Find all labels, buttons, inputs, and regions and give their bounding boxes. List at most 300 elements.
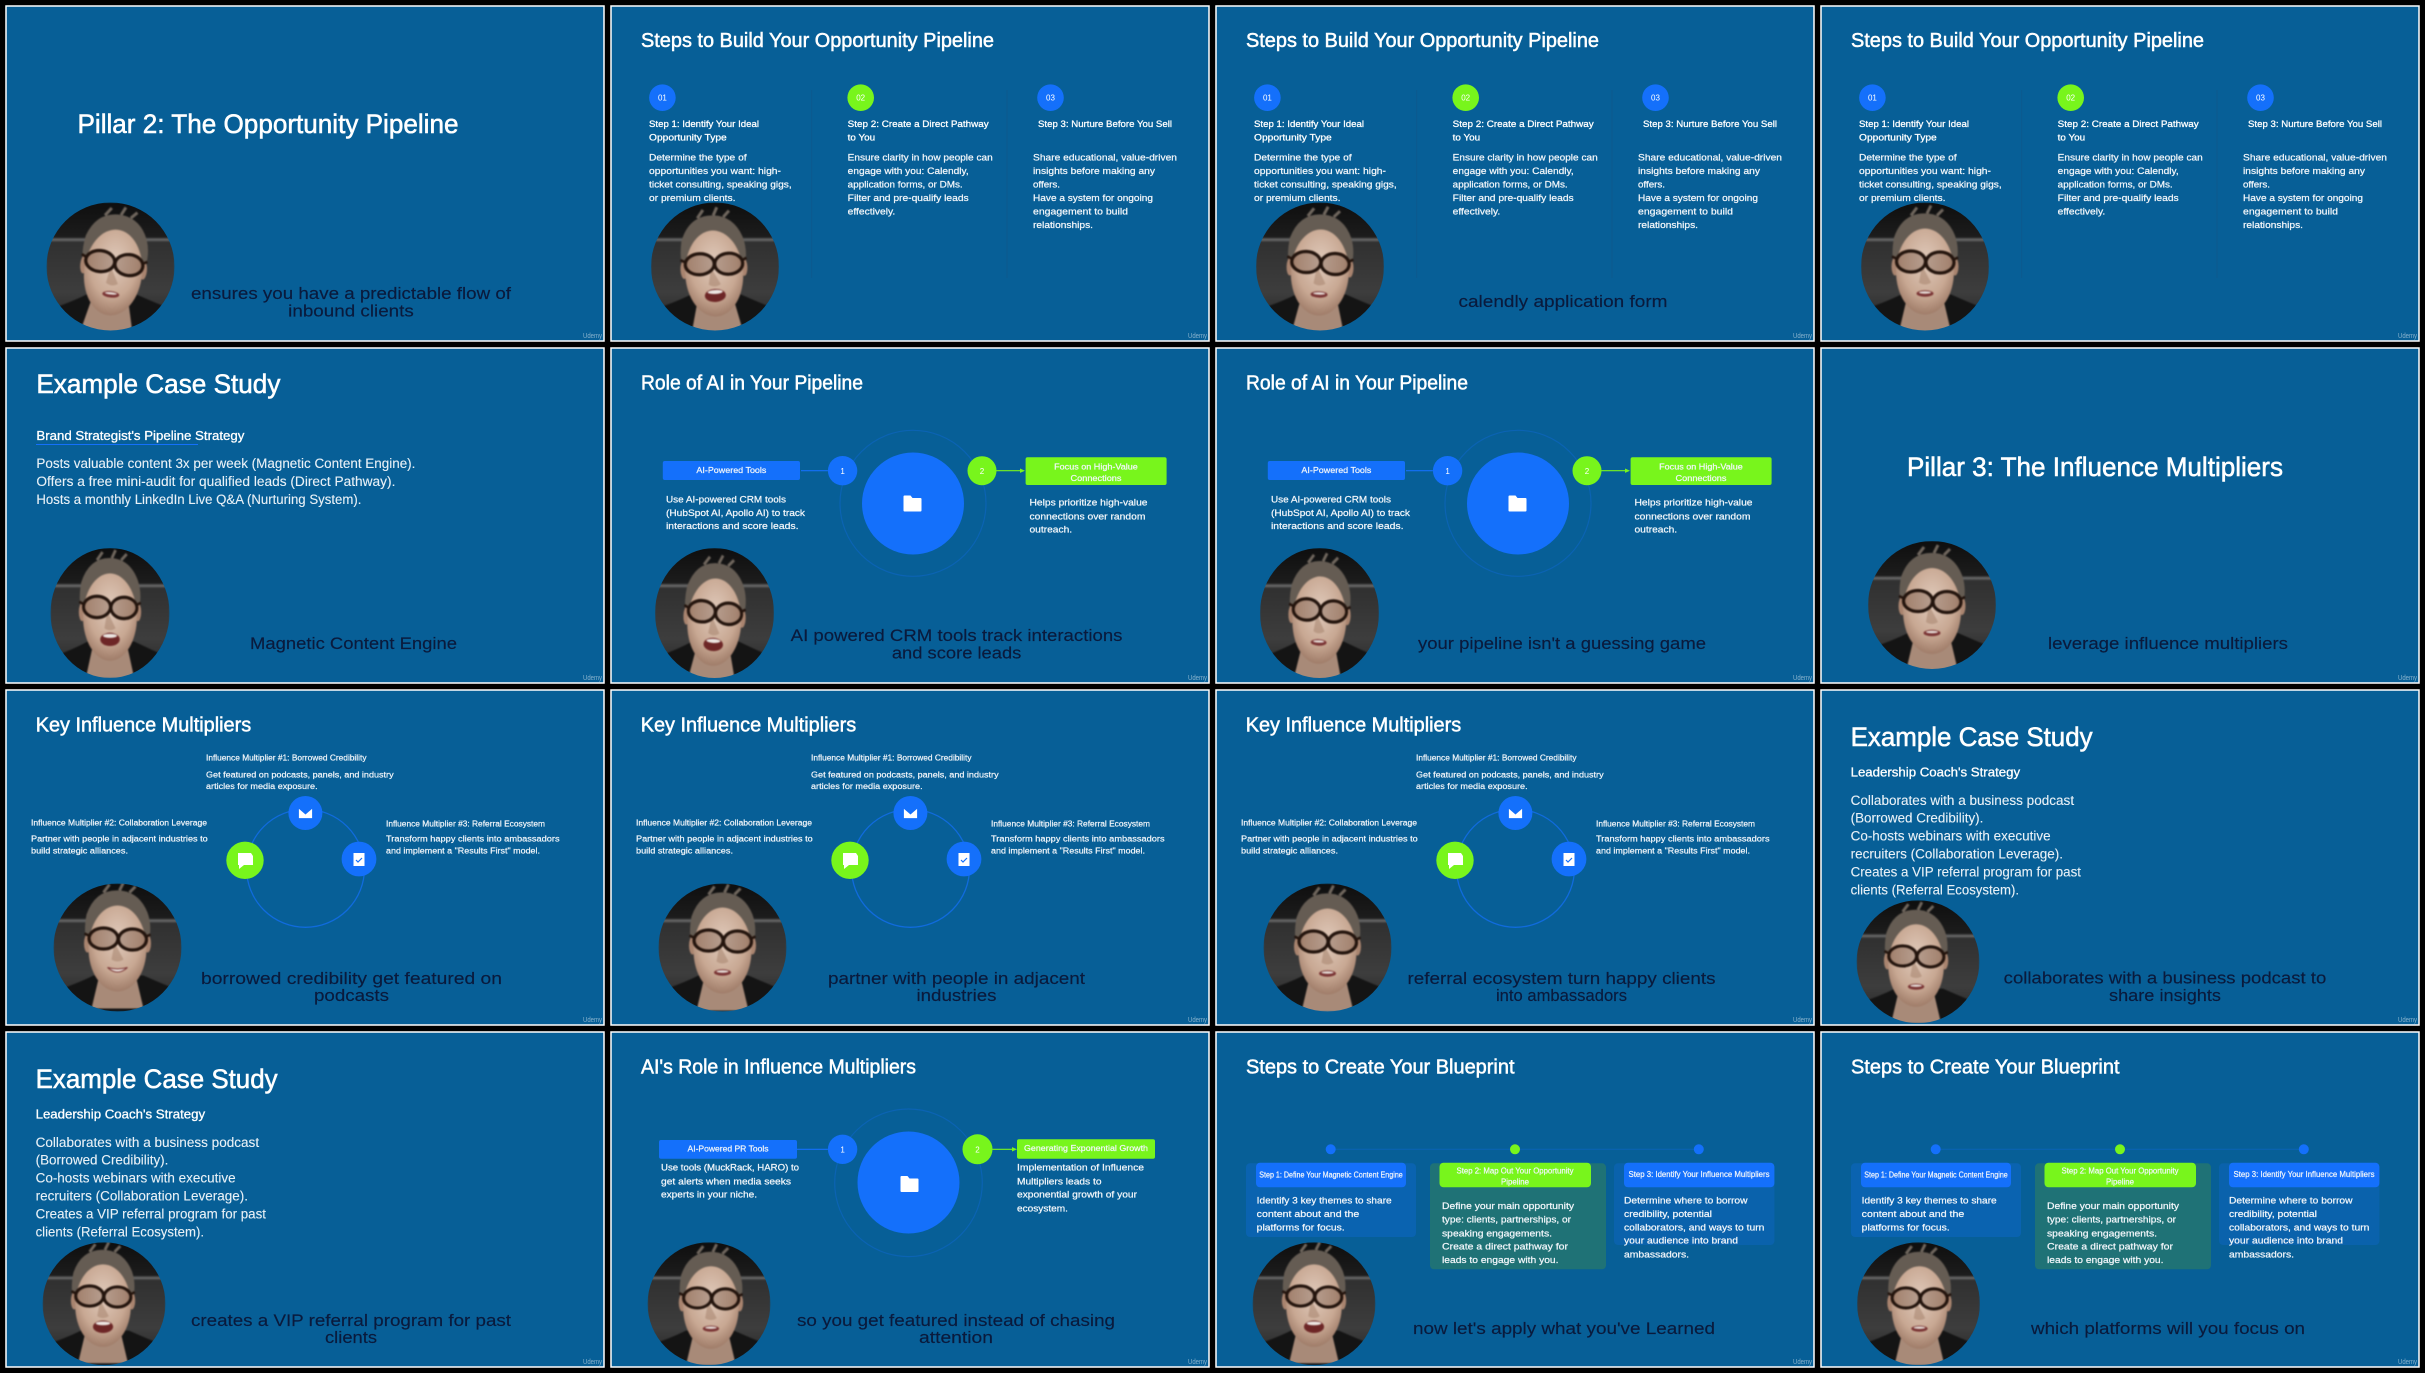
body text: (Borrowed Credibility). (1851, 811, 1983, 826)
step 3 card: ambassadors. (1624, 1249, 1689, 1260)
step 3 column: Have a system for ongoing (1638, 193, 1758, 204)
step 1 card: Identify 3 key themes to share (1257, 1195, 1392, 1206)
multiplier 3 text: Transform happy clients into ambassadors (991, 835, 1165, 844)
right description: ecosystem. (1017, 1203, 1068, 1214)
multiplier 3 text (386, 819, 560, 855)
timeline (1931, 1144, 2309, 1154)
step 2 column: to You (1453, 133, 1480, 144)
caption (791, 626, 1122, 662)
watermark: Udemy (1188, 333, 1207, 340)
caption: which platforms will you focus on (2030, 1319, 2305, 1338)
caption: share insights (2109, 986, 2221, 1005)
right node and label: Connections (1676, 474, 1726, 483)
step 2 card: Pipeline (2106, 1177, 2135, 1186)
caption: creates a VIP referral program for past (191, 1311, 511, 1330)
multiplier 1 text: Get featured on podcasts, panels, and industry (1416, 770, 1604, 779)
multiplier 2 text (636, 818, 813, 855)
right description: exponential growth of your (1017, 1190, 1138, 1201)
right description: Helps prioritize high-value (1030, 498, 1148, 509)
step 2 card: speaking engagements. (2047, 1228, 2157, 1239)
cycle diagram (831, 796, 981, 927)
step 1 column: ticket consulting, speaking gigs, (1859, 180, 2002, 191)
step 2 column: application forms, or DMs. (2058, 180, 2173, 191)
caption: so you get featured instead of chasing (797, 1311, 1115, 1330)
step 3 card: credibility, potential (1624, 1209, 1712, 1220)
panel: leadership coach case study, frame 1 (1821, 690, 2419, 1025)
multiplier 2 text: build strategic alliances. (1241, 846, 1338, 855)
step 3 card: Step 3: Identify Your Influence Multipliers (1628, 1170, 1770, 1179)
panel: steps to create blueprint, frame 2 (1821, 1032, 2419, 1367)
panel: role of AI, frame 1 (611, 348, 1209, 685)
step 3 column: insights before making any (1638, 166, 1760, 177)
step 2 column: Ensure clarity in how people can (2058, 153, 2203, 164)
step 3 card (2219, 1163, 2379, 1260)
step 2 card (2035, 1163, 2211, 1269)
body text: (Borrowed Credibility). (36, 1153, 168, 1168)
step 2 card: Define your main opportunity (2047, 1201, 2179, 1212)
step 2 column (1452, 84, 1598, 218)
slide title: Steps to Build Your Opportunity Pipeline (1851, 30, 2204, 52)
step 2 card: Pipeline (1501, 1177, 1530, 1186)
step 2 card: Step 2: Map Out Your Opportunity (2062, 1167, 2178, 1176)
left node and label: AI-Powered Tools (1301, 466, 1371, 475)
step 3 column (1033, 84, 1177, 231)
caption: leverage influence multipliers (2048, 634, 2288, 653)
multiplier 1 text: Influence Multiplier #1: Borrowed Credibility (811, 754, 972, 763)
step 2 card: Create a direct pathway for (1442, 1242, 1569, 1253)
step 1 card: Step 1: Define Your Magnetic Content Engine (1259, 1170, 1403, 1179)
panel: steps to build pipeline, frame 1 (611, 6, 1209, 341)
step 1 column: or premium clients. (1254, 193, 1340, 204)
right node and label (962, 1134, 1155, 1164)
right node and label: Generating Exponential Growth (1024, 1144, 1148, 1153)
body text (36, 1135, 266, 1240)
step 2 column: Step 2: Create a Direct Pathway (848, 119, 989, 130)
step 3 column: 03 (1046, 94, 1055, 102)
step 1 column (1254, 84, 1397, 204)
caption: ensures you have a predictable flow of (191, 284, 511, 303)
step 1 card: Step 1: Define Your Magnetic Content Engine (1864, 1170, 2008, 1179)
step 1 column: Step 1: Identify Your Ideal (1859, 119, 1969, 130)
left node and label: 1 (840, 467, 845, 476)
step 2 column: engage with you: Calendly, (2058, 166, 2179, 177)
caption (797, 1311, 1115, 1347)
step 3 column: 03 (2256, 94, 2265, 102)
step 2 column: Ensure clarity in how people can (848, 153, 993, 164)
left description: (HubSpot AI, Apollo AI) to track (1271, 508, 1410, 519)
step 1 card (1246, 1163, 1416, 1237)
left description (661, 1163, 799, 1201)
step 3 card: credibility, potential (2229, 1209, 2317, 1220)
multiplier 2 text (1241, 818, 1418, 855)
step 3 column: Step 3: Nurture Before You Sell (2248, 119, 2382, 130)
multiplier 1 text: Get featured on podcasts, panels, and industry (206, 770, 394, 779)
watermark: Udemy (1793, 1017, 1812, 1024)
step 3 card: collaborators, and ways to turn (2229, 1222, 2369, 1233)
step 1 column: opportunities you want: high- (649, 166, 781, 177)
central hub diagram (1445, 430, 1591, 576)
presenter portrait (1260, 548, 1379, 682)
slide title: Steps to Create Your Blueprint (1851, 1056, 2120, 1078)
right description: outreach. (1030, 525, 1072, 536)
panel: leadership coach case study, frame 2 (6, 1032, 604, 1367)
body text: clients (Referral Ecosystem). (36, 1225, 204, 1240)
cycle diagram (1436, 796, 1586, 927)
step 1 column: ticket consulting, speaking gigs, (1254, 180, 1397, 191)
multiplier 2 text: build strategic alliances. (31, 846, 128, 855)
step 1 column: 01 (1263, 94, 1272, 102)
right description (1634, 498, 1752, 536)
slide title: Example Case Study (36, 1064, 278, 1094)
panel: steps to build pipeline, frame 3 (1821, 6, 2419, 341)
caption (1408, 969, 1716, 1005)
step 1 column: ticket consulting, speaking gigs, (649, 180, 792, 191)
step 1 card: content about and the (1862, 1209, 1964, 1220)
multiplier 2 text: Influence Multiplier #2: Collaboration Leverage (31, 818, 208, 827)
watermark: Udemy (583, 1017, 602, 1024)
multiplier 3 text: and implement a "Results First" model. (386, 846, 540, 855)
step 3 column: engagement to build (2243, 206, 2338, 218)
left node and label: 1 (1445, 467, 1450, 476)
left description: Use tools (MuckRack, HARO) to (661, 1163, 799, 1174)
caption: calendly application form (1458, 292, 1668, 311)
presenter portrait (1857, 1242, 1980, 1365)
multiplier 3 text (991, 819, 1165, 855)
right description: outreach. (1634, 525, 1677, 536)
step 3 column: Have a system for ongoing (2243, 193, 2363, 204)
body text: Posts valuable content 3x per week (Magnetic Content Engine). (36, 456, 415, 471)
step 1 card: content about and the (1257, 1209, 1359, 1220)
watermark: Udemy (1188, 1017, 1207, 1024)
step 2 card: type: clients, partnerships, or (1442, 1215, 1572, 1226)
step 1 column: Determine the type of (649, 153, 747, 164)
slide title: Steps to Create Your Blueprint (1246, 1056, 1515, 1078)
body text: recruiters (Collaboration Leverage). (36, 1189, 248, 1204)
body text: clients (Referral Ecosystem). (1851, 883, 2019, 898)
step 1 column (1859, 84, 2002, 204)
body text (1851, 793, 2081, 898)
step 3 card (1614, 1163, 1774, 1260)
step 3 column: Step 3: Nurture Before You Sell (1643, 119, 1777, 130)
caption: partner with people in adjacent (828, 969, 1085, 988)
panel: AI's role in influence multipliers (611, 1032, 1209, 1367)
watermark: Udemy (1793, 333, 1812, 340)
presenter portrait (1253, 1242, 1375, 1365)
caption: AI powered CRM tools track interactions (791, 626, 1122, 645)
step 3 column: engagement to build (1638, 206, 1733, 218)
step 2 card: speaking engagements. (1442, 1228, 1552, 1239)
left node and label (663, 456, 857, 485)
timeline (1326, 1144, 1704, 1154)
step 1 card: platforms for focus. (1862, 1222, 1950, 1233)
right node and label (1572, 456, 1772, 485)
slide title: Key Influence Multipliers (36, 714, 251, 736)
step 2 column: application forms, or DMs. (1453, 180, 1568, 191)
step 2 card: Define your main opportunity (1442, 1201, 1574, 1212)
step 1 column: opportunities you want: high- (1859, 166, 1991, 177)
panel: Pillar 2 title slide (6, 6, 604, 341)
subheading: Brand Strategist's Pipeline Strategy (36, 428, 245, 443)
step 3 column: Share educational, value-driven (1638, 153, 1782, 164)
step 3 column: Step 3: Nurture Before You Sell (1038, 119, 1172, 130)
left description: interactions and score leads. (666, 521, 798, 532)
left node and label (1268, 456, 1462, 485)
multiplier 1 text: articles for media exposure. (1416, 782, 1528, 791)
left description: interactions and score leads. (1271, 521, 1404, 532)
left node and label: AI-Powered PR Tools (688, 1145, 768, 1154)
step 2 card: Step 2: Map Out Your Opportunity (1456, 1167, 1574, 1176)
right description: connections over random (1030, 511, 1146, 522)
step 2 card: type: clients, partnerships, or (2047, 1215, 2177, 1226)
body text: Creates a VIP referral program for past (1851, 865, 2081, 880)
caption: your pipeline isn't a guessing game (1418, 634, 1706, 653)
multiplier 1 text: Get featured on podcasts, panels, and industry (811, 770, 999, 779)
step 3 card: ambassadors. (2229, 1249, 2294, 1260)
panel: role of AI, frame 2 (1216, 348, 1814, 683)
step 2 column: to You (848, 133, 875, 144)
caption (191, 284, 511, 320)
step 3 column: Share educational, value-driven (2243, 153, 2387, 164)
left description: Use AI-powered CRM tools (666, 494, 786, 505)
multiplier 1 text: Influence Multiplier #1: Borrowed Credibility (206, 754, 366, 763)
step 2 column: Filter and pre-qualify leads (848, 193, 969, 204)
step 2 column: engage with you: Calendly, (848, 166, 969, 177)
step 1 column: Step 1: Identify Your Ideal (1254, 119, 1364, 130)
multiplier 3 text: Influence Multiplier #3: Referral Ecosystem (1596, 819, 1755, 828)
left description (1271, 494, 1410, 532)
multiplier 2 text: Influence Multiplier #2: Collaboration Leverage (636, 818, 813, 827)
step 1 column: Step 1: Identify Your Ideal (649, 119, 759, 130)
step 3 column: offers. (2243, 180, 2270, 191)
step 1 column: Opportunity Type (1859, 133, 1937, 144)
multiplier 1 text: Influence Multiplier #1: Borrowed Credibility (1416, 754, 1576, 763)
slide title: AI's Role in Influence Multipliers (641, 1056, 916, 1078)
step 3 column: insights before making any (1033, 166, 1155, 177)
step 1 column: or premium clients. (649, 193, 736, 204)
presenter portrait (1868, 541, 1996, 671)
step 2 column: Filter and pre-qualify leads (1453, 193, 1574, 204)
step 2 column: 02 (2066, 94, 2076, 102)
step 3 column (2243, 84, 2387, 231)
slide title: Pillar 2: The Opportunity Pipeline (78, 109, 458, 139)
step 1 card: Identify 3 key themes to share (1862, 1195, 1997, 1206)
multiplier 3 text: Influence Multiplier #3: Referral Ecosystem (991, 819, 1150, 828)
right node and label (968, 456, 1167, 485)
body text: Co-hosts webinars with executive (36, 1171, 236, 1186)
central hub diagram (835, 1109, 982, 1257)
step 3 column: offers. (1033, 180, 1060, 191)
step 3 column: engagement to build (1033, 206, 1128, 218)
panel: steps to build pipeline, frame 2 (1216, 6, 1814, 341)
slide title: Example Case Study (1851, 722, 2093, 752)
left node and label: 1 (840, 1146, 845, 1155)
step 2 column (2057, 84, 2203, 218)
step 3 column: Have a system for ongoing (1033, 193, 1153, 204)
body text: Hosts a monthly LinkedIn Live Q&A (Nurturing System). (36, 492, 361, 507)
step 3 column: offers. (1638, 180, 1665, 191)
presenter portrait (648, 1242, 770, 1365)
watermark: Udemy (1188, 675, 1207, 682)
slide title: Pillar 3: The Influence Multipliers (1907, 452, 2283, 482)
left description: (HubSpot AI, Apollo AI) to track (666, 508, 805, 519)
step 3 card: your audience into brand (2229, 1236, 2343, 1247)
slide title: Key Influence Multipliers (641, 714, 856, 736)
subheading: Leadership Coach's Strategy (36, 1107, 206, 1122)
body text: Offers a free mini-audit for qualified leads (Direct Pathway). (36, 474, 395, 489)
multiplier 3 text: and implement a "Results First" model. (991, 846, 1145, 855)
watermark: Udemy (2398, 1359, 2417, 1366)
step 1 column: Determine the type of (1859, 153, 1957, 164)
presenter portrait (46, 202, 174, 336)
slide title: Role of AI in Your Pipeline (641, 372, 863, 394)
panel: steps to create blueprint, frame 1 (1216, 1032, 1814, 1367)
watermark: Udemy (583, 333, 602, 340)
caption: podcasts (314, 986, 389, 1005)
step 2 column: effectively. (2058, 206, 2105, 218)
watermark: Udemy (1793, 675, 1812, 682)
step 2 card: leads to engage with you. (2047, 1255, 2164, 1266)
multiplier 2 text: Partner with people in adjacent industries to (636, 835, 813, 844)
multiplier 2 text: Influence Multiplier #2: Collaboration Leverage (1241, 818, 1418, 827)
presenter portrait (1264, 884, 1392, 1012)
multiplier 3 text: and implement a "Results First" model. (1596, 846, 1750, 855)
multiplier 2 text (31, 818, 208, 855)
step 3 card: your audience into brand (1624, 1236, 1738, 1247)
presenter portrait (50, 548, 170, 678)
caption (191, 1311, 511, 1347)
step 2 column: to You (2058, 133, 2085, 144)
step 3 column: 03 (1651, 94, 1660, 102)
step 3 column: relationships. (2243, 220, 2303, 231)
multiplier 1 text (206, 754, 394, 791)
caption: collaborates with a business podcast to (2004, 969, 2326, 988)
presenter portrait (43, 1242, 165, 1365)
step 1 column: Opportunity Type (649, 133, 727, 144)
caption: and score leads (892, 644, 1021, 663)
slide title: Steps to Build Your Opportunity Pipeline (641, 30, 994, 52)
step 1 column: 01 (658, 94, 667, 102)
step 2 column: Step 2: Create a Direct Pathway (2058, 119, 2199, 130)
caption: borrowed credibility get featured on (201, 969, 502, 988)
step 2 column: Step 2: Create a Direct Pathway (1453, 119, 1594, 130)
step 1 column (649, 84, 792, 204)
step 2 column: effectively. (1453, 206, 1500, 218)
step 1 column: opportunities you want: high- (1254, 166, 1386, 177)
step 3 column (1638, 84, 1782, 231)
step 2 column: effectively. (848, 206, 895, 218)
right description: Helps prioritize high-value (1634, 498, 1752, 509)
caption (2004, 968, 2326, 1005)
multiplier 2 text: build strategic alliances. (636, 846, 733, 855)
caption: industries (916, 986, 996, 1005)
body text: Creates a VIP referral program for past (36, 1207, 266, 1222)
panel: key influence multipliers, frame 1 (6, 690, 604, 1025)
panel: key influence multipliers, frame 3 (1216, 690, 1814, 1025)
panel: key influence multipliers, frame 2 (611, 690, 1209, 1025)
body text (36, 456, 415, 507)
caption: clients (325, 1328, 377, 1347)
step 1 column: 01 (1868, 94, 1877, 102)
caption: now let's apply what you've Learned (1413, 1319, 1715, 1338)
right node and label: 2 (1585, 467, 1590, 476)
step 2 column: application forms, or DMs. (848, 180, 963, 191)
multiplier 3 text: Transform happy clients into ambassadors (386, 835, 560, 844)
caption (201, 969, 502, 1005)
presenter portrait (1857, 900, 1979, 1023)
multiplier 3 text: Transform happy clients into ambassadors (1596, 835, 1770, 844)
step 1 card (1851, 1163, 2021, 1237)
watermark: Udemy (583, 675, 602, 682)
caption: attention (919, 1328, 993, 1347)
right description: Multipliers leads to (1017, 1176, 1102, 1187)
right description: connections over random (1634, 511, 1750, 522)
presenter portrait (655, 548, 774, 685)
central hub diagram (840, 430, 986, 576)
step 1 column: Determine the type of (1254, 153, 1352, 164)
step 3 column: Share educational, value-driven (1033, 153, 1177, 164)
step 2 card: leads to engage with you. (1442, 1255, 1558, 1266)
presenter portrait (1861, 202, 1989, 332)
watermark: Udemy (2398, 1017, 2417, 1024)
step 2 column (847, 84, 993, 218)
slide title: Key Influence Multipliers (1246, 714, 1461, 736)
watermark: Udemy (1793, 1359, 1812, 1366)
right node and label: 2 (975, 1146, 980, 1155)
step 1 card: platforms for focus. (1257, 1222, 1345, 1233)
left node and label: AI-Powered Tools (696, 466, 766, 475)
body text: recruiters (Collaboration Leverage). (1851, 847, 2063, 862)
step 2 column: Ensure clarity in how people can (1453, 153, 1598, 164)
slide title: Steps to Build Your Opportunity Pipeline (1246, 30, 1599, 52)
multiplier 2 text: Partner with people in adjacent industries to (31, 835, 208, 844)
right node and label: Focus on High-Value (1659, 462, 1743, 471)
watermark: Udemy (2398, 675, 2417, 682)
panel: Pillar 3 title slide (1821, 348, 2419, 683)
panel: brand strategist case study (6, 348, 604, 683)
presenter portrait (651, 202, 779, 335)
right description (1030, 498, 1148, 536)
body text: Collaborates with a business podcast (36, 1135, 259, 1150)
caption: into ambassadors (1496, 986, 1627, 1005)
step 1 column: or premium clients. (1859, 193, 1946, 204)
caption: Magnetic Content Engine (250, 634, 457, 653)
step 3 column: relationships. (1638, 220, 1698, 231)
step 2 column: 02 (1461, 94, 1471, 102)
watermark: Udemy (2398, 333, 2417, 340)
slide title: Role of AI in Your Pipeline (1246, 372, 1468, 394)
caption: referral ecosystem turn happy clients (1408, 969, 1716, 988)
presenter portrait (1256, 202, 1384, 334)
body text: Co-hosts webinars with executive (1851, 829, 2051, 844)
multiplier 3 text: Influence Multiplier #3: Referral Ecosystem (386, 819, 545, 828)
caption (828, 969, 1085, 1005)
step 3 card: collaborators, and ways to turn (1624, 1222, 1764, 1233)
step 2 card (1430, 1163, 1606, 1269)
step 2 column: 02 (856, 94, 866, 102)
step 3 card: Step 3: Identify Your Influence Multipliers (2234, 1170, 2374, 1179)
presenter portrait (658, 884, 786, 1012)
presenter portrait (54, 882, 182, 1012)
step 1 column: Opportunity Type (1254, 133, 1332, 144)
right description: Implementation of Influence (1017, 1163, 1144, 1174)
multiplier 1 text: articles for media exposure. (811, 782, 923, 791)
right node and label: 2 (980, 467, 985, 476)
multiplier 3 text (1596, 819, 1770, 855)
step 2 column: engage with you: Calendly, (1453, 166, 1574, 177)
slide title: Example Case Study (36, 369, 281, 399)
right node and label: Connections (1070, 474, 1122, 483)
left node and label (659, 1135, 857, 1164)
